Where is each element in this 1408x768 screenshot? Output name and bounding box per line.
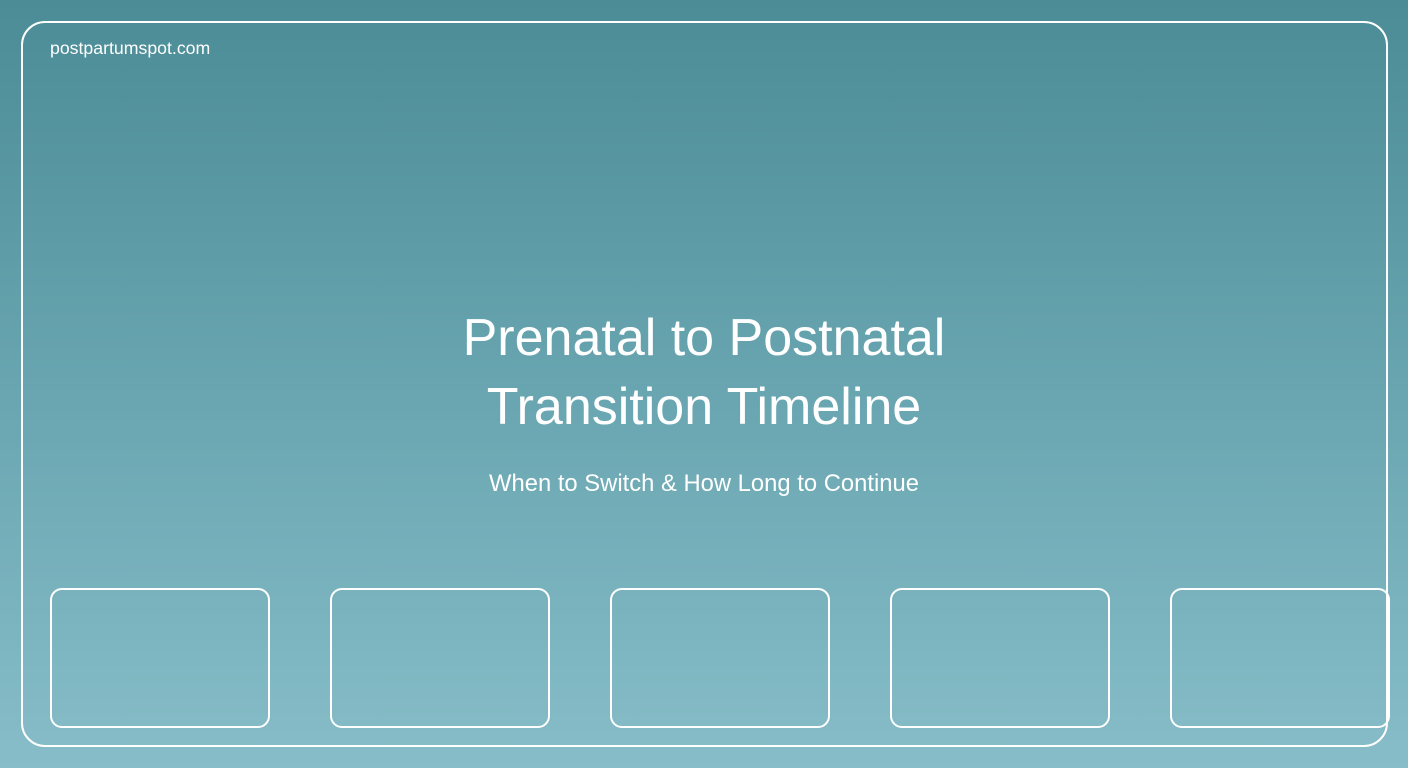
title [463, 309, 945, 436]
title: Transition Timeline [487, 378, 921, 436]
title: Prenatal to Postnatal [463, 309, 945, 367]
box 4 [890, 588, 1110, 728]
box 3 [610, 588, 830, 728]
box 5 [1170, 588, 1390, 728]
box 1 [50, 588, 270, 728]
watermark: postpartumspot.com [50, 38, 210, 58]
box 2 [330, 588, 550, 728]
subtitle: When to Switch & How Long to Continue [489, 470, 919, 497]
